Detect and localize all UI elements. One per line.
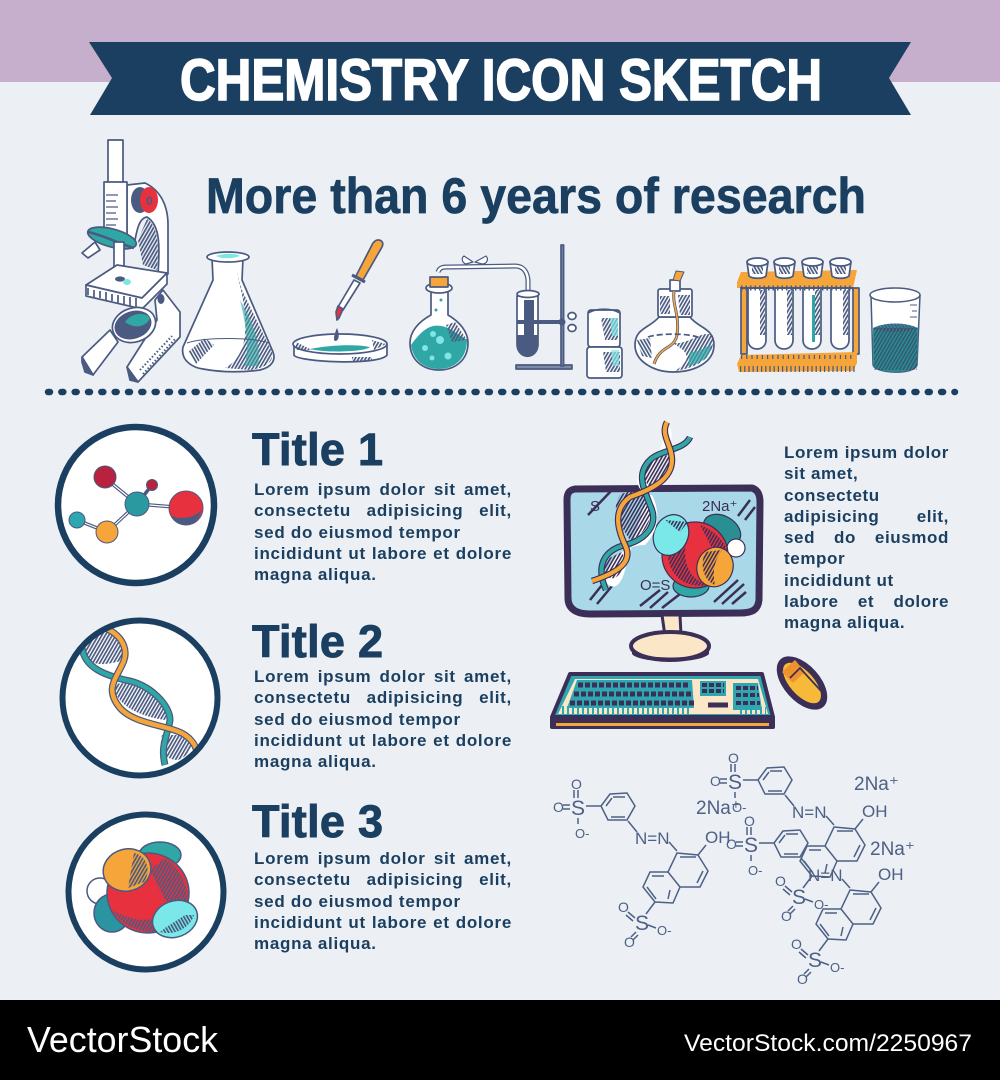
formula 1: S xyxy=(635,912,649,935)
text block 1: incididunt ut labore et dolore xyxy=(254,544,512,563)
icon: microscope xyxy=(82,140,180,382)
title 1: Title 1 xyxy=(252,424,383,475)
text block 1 xyxy=(254,480,512,584)
text block 2: sed do eiusmod tempor xyxy=(254,710,461,728)
formula 3: O xyxy=(791,936,802,952)
icon: molecule circle xyxy=(58,427,214,583)
text block 1: sed do eiusmod tempor xyxy=(254,522,461,542)
formula 1: O xyxy=(571,776,582,792)
text block 2 xyxy=(254,667,512,771)
formula 1: N=N xyxy=(635,829,669,848)
formula 3: S xyxy=(744,834,758,857)
footer bar: VectorStock.com/2250967 xyxy=(684,1030,972,1057)
formula 2: N=N xyxy=(792,803,826,822)
title 2: Title 2 xyxy=(252,616,383,667)
formula 2: O xyxy=(775,873,786,889)
dotted divider xyxy=(48,389,955,395)
formula 1: O xyxy=(624,934,635,950)
text block right: magna aliqua. xyxy=(784,613,905,632)
formula 1: O xyxy=(618,899,629,915)
DNA on screen xyxy=(592,422,690,590)
icon: beaker xyxy=(870,288,920,372)
text block 2: consectetu adipisicing elit, xyxy=(254,688,512,707)
text block 3: Lorem ipsum dolor sit amet, xyxy=(254,849,512,868)
icon: conical flask xyxy=(183,252,274,372)
formula 1: S xyxy=(571,797,585,820)
formula 2: O xyxy=(728,750,739,766)
text block 3 xyxy=(254,849,512,953)
formula marks on screen: S xyxy=(590,498,600,515)
formula 3: O- xyxy=(748,863,762,878)
formula 2: S xyxy=(728,771,742,794)
formula 2: OH xyxy=(862,802,888,821)
molecule on screen xyxy=(647,508,746,597)
formula 3 xyxy=(726,813,904,987)
footer bar xyxy=(0,1000,1000,1080)
text block 1: magna aliqua. xyxy=(254,565,377,584)
text block right: tempor xyxy=(784,549,845,568)
text block right: labore et dolore xyxy=(784,592,949,611)
chemical formulas xyxy=(553,750,915,987)
icon: microscope: 0 xyxy=(146,194,153,208)
text block right: consectetu xyxy=(784,486,880,504)
icon: keyboard xyxy=(550,674,775,729)
sodium labels: 2Na⁺ xyxy=(696,798,741,819)
icon: atom circle xyxy=(68,814,224,970)
formula 1 xyxy=(553,776,730,950)
sodium labels: 2Na⁺ xyxy=(870,839,915,860)
top lilac band xyxy=(0,0,1000,82)
text block right: sed do eiusmod xyxy=(784,528,949,547)
footer bar: VectorStock xyxy=(27,1019,219,1060)
formula 1: OH xyxy=(705,828,730,847)
text block right: sit amet, xyxy=(784,464,858,483)
formula 2 xyxy=(710,750,888,924)
formula 2: S xyxy=(792,886,806,909)
text block 1: Lorem ipsum dolor sit amet, xyxy=(254,480,512,499)
formula 3: O xyxy=(726,836,737,852)
icon: computer mouse xyxy=(767,647,837,719)
formula 3: S xyxy=(808,949,822,972)
formula 3: OH xyxy=(878,865,904,884)
formula 1: O xyxy=(553,799,564,815)
title ribbon: CHEMISTRY ICON SKETCH xyxy=(180,48,822,113)
text block 3: consectetu adipisicing elit, xyxy=(254,870,512,889)
text block right xyxy=(784,443,949,632)
sodium labels: 2Na⁺ xyxy=(854,774,899,795)
formula marks on screen xyxy=(590,498,737,594)
formula 3: O xyxy=(744,813,755,829)
text block 3: sed do eiusmod tempor xyxy=(254,892,461,910)
icon: glass cylinders xyxy=(587,309,622,378)
icon: dropper and dish xyxy=(293,240,387,362)
text block 2: magna aliqua. xyxy=(254,752,377,771)
text block 2: incididunt ut labore et dolore xyxy=(254,731,512,750)
formula 2: O xyxy=(781,908,792,924)
text block 3: incididunt ut labore et dolore xyxy=(254,913,512,932)
formula 1: O- xyxy=(657,923,671,938)
formula 3: O- xyxy=(830,960,844,975)
text block right: adipisicing elit, xyxy=(784,507,949,526)
text block right: incididunt ut xyxy=(784,570,894,590)
text block 3: magna aliqua. xyxy=(254,934,377,953)
icon: computer monitor xyxy=(567,422,760,662)
formula marks on screen: O=S xyxy=(640,577,670,594)
formula 3: O xyxy=(797,971,808,987)
icon: DNA circle xyxy=(62,620,218,776)
formula 2: O xyxy=(710,773,721,789)
formula 3: N=N xyxy=(808,866,842,885)
icon: round flask with tube and stand xyxy=(410,245,576,370)
formula marks on screen: 2Na⁺ xyxy=(702,498,737,515)
icon: spirit burner xyxy=(635,271,714,372)
heading: More than 6 years of research xyxy=(206,168,866,224)
sodium labels xyxy=(696,774,915,860)
text block 1: consectetu adipisicing elit, xyxy=(254,501,512,520)
formula 2: O- xyxy=(814,897,828,912)
title 3: Title 3 xyxy=(252,796,383,847)
text block right: Lorem ipsum dolor xyxy=(784,443,949,462)
formula 1: O- xyxy=(575,826,589,841)
icon: test tube rack xyxy=(737,258,859,372)
formula 2: O- xyxy=(732,800,746,815)
text block 2: Lorem ipsum dolor sit amet, xyxy=(254,667,512,686)
